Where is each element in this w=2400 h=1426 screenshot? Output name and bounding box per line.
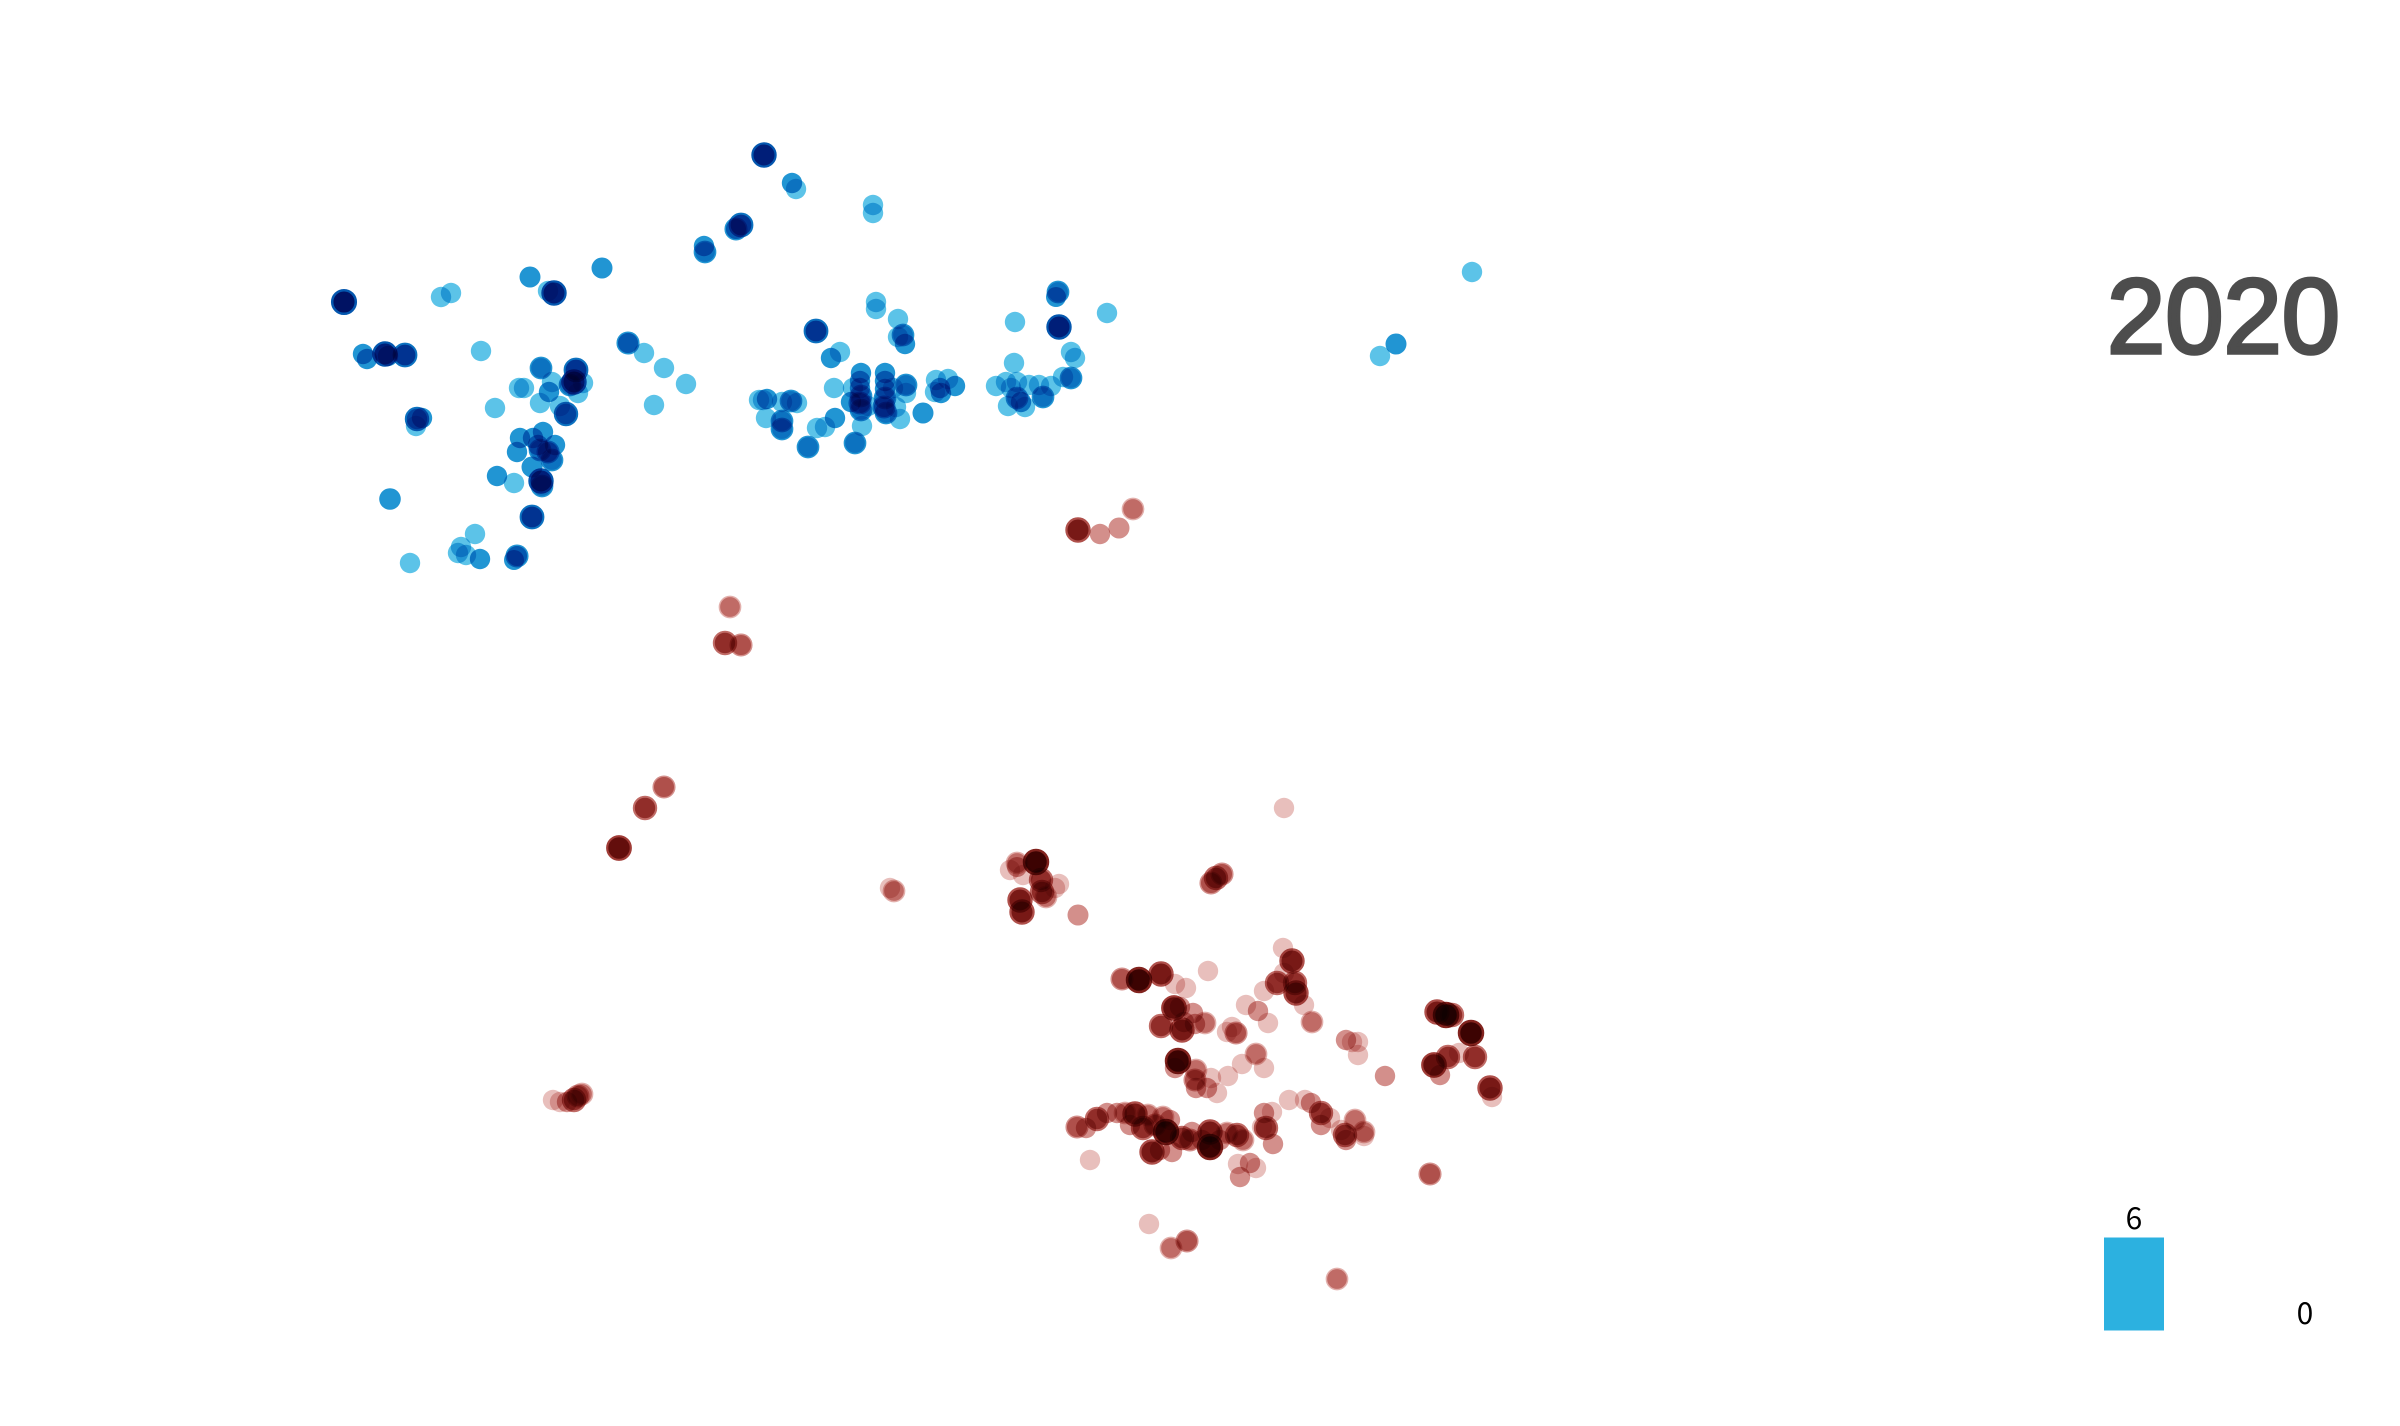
scatter: blue dots (northern cluster) (332, 143, 1482, 573)
legend bar (2104, 1194, 2164, 1330)
scatter: red dots (southern cluster) (543, 498, 1502, 1290)
year label: 2020 (2107, 256, 2340, 376)
legend value: 6: 6 (2126, 1194, 2142, 1238)
legend value: 0: 0 (2297, 1289, 2313, 1333)
